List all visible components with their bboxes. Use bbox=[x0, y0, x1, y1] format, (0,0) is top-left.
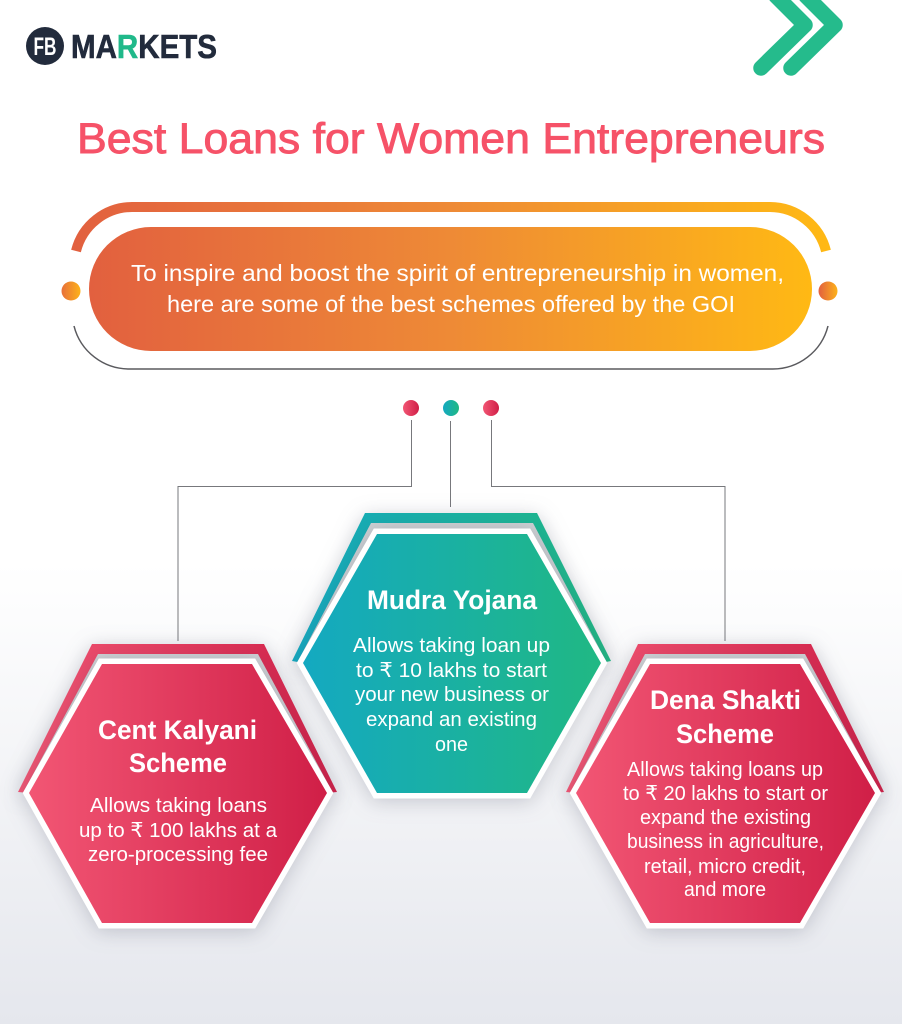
text: Dena Shakti description: and more bbox=[684, 878, 766, 901]
logo: FB Markets: MARKETS bbox=[71, 29, 217, 66]
banner bbox=[62, 207, 838, 369]
heading: Cent Kalyani Scheme bbox=[98, 715, 257, 778]
text: Dena Shakti description: expand the existing bbox=[640, 806, 811, 829]
text: Dena Shakti description: retail, micro credit, bbox=[644, 855, 806, 878]
panel: Dena Shakti Scheme bbox=[566, 644, 884, 923]
connector dots bbox=[403, 400, 499, 416]
text: Dena Shakti description: to ₹ 20 lakhs to start or bbox=[623, 782, 828, 805]
text: Cent Kalyani description: up to ₹ 100 lakhs at a bbox=[79, 819, 278, 842]
text: Cent Kalyani description: Allows taking loans bbox=[90, 794, 267, 817]
heading: Dena Shakti Scheme bbox=[650, 685, 801, 749]
logo: FB Markets bbox=[26, 27, 217, 66]
heading: Dena Shakti Scheme: Scheme bbox=[676, 719, 774, 749]
text: Mudra description: your new business or bbox=[355, 683, 549, 706]
connector lines bbox=[178, 420, 725, 641]
icon: double chevron bbox=[761, 0, 835, 68]
logo: FB Markets: FB bbox=[34, 33, 56, 61]
text: Dena Shakti description: Allows taking loans up bbox=[627, 758, 823, 781]
banner: here are some of the best schemes offered by the GOI bbox=[167, 291, 735, 317]
text: Mudra description: Allows taking loan up bbox=[353, 634, 550, 657]
text: Cent Kalyani description: zero-processing fee bbox=[88, 843, 268, 866]
text: Dena Shakti description: business in agriculture, bbox=[627, 830, 824, 853]
heading: Cent Kalyani Scheme: Scheme bbox=[129, 748, 227, 778]
text: Cent Kalyani description bbox=[79, 794, 278, 866]
panel: Mudra Yojana bbox=[292, 513, 611, 793]
text: Mudra description: to ₹ 10 lakhs to start bbox=[356, 659, 547, 682]
heading: Dena Shakti Scheme: Dena Shakti bbox=[650, 685, 801, 715]
text: Mudra description: one bbox=[435, 733, 468, 756]
text: Mudra description bbox=[353, 634, 550, 756]
title: Best Loans for Women Entrepreneurs bbox=[77, 115, 825, 163]
text: Dena Shakti description bbox=[623, 758, 828, 901]
heading: Cent Kalyani Scheme: Cent Kalyani bbox=[98, 715, 257, 745]
heading: Mudra Yojana: Mudra Yojana bbox=[367, 585, 538, 615]
banner: To inspire and boost the spirit of entrepreneurship in women, bbox=[131, 260, 784, 286]
panel: Cent Kalyani Scheme bbox=[18, 644, 337, 923]
text: Mudra description: expand an existing bbox=[366, 708, 537, 731]
